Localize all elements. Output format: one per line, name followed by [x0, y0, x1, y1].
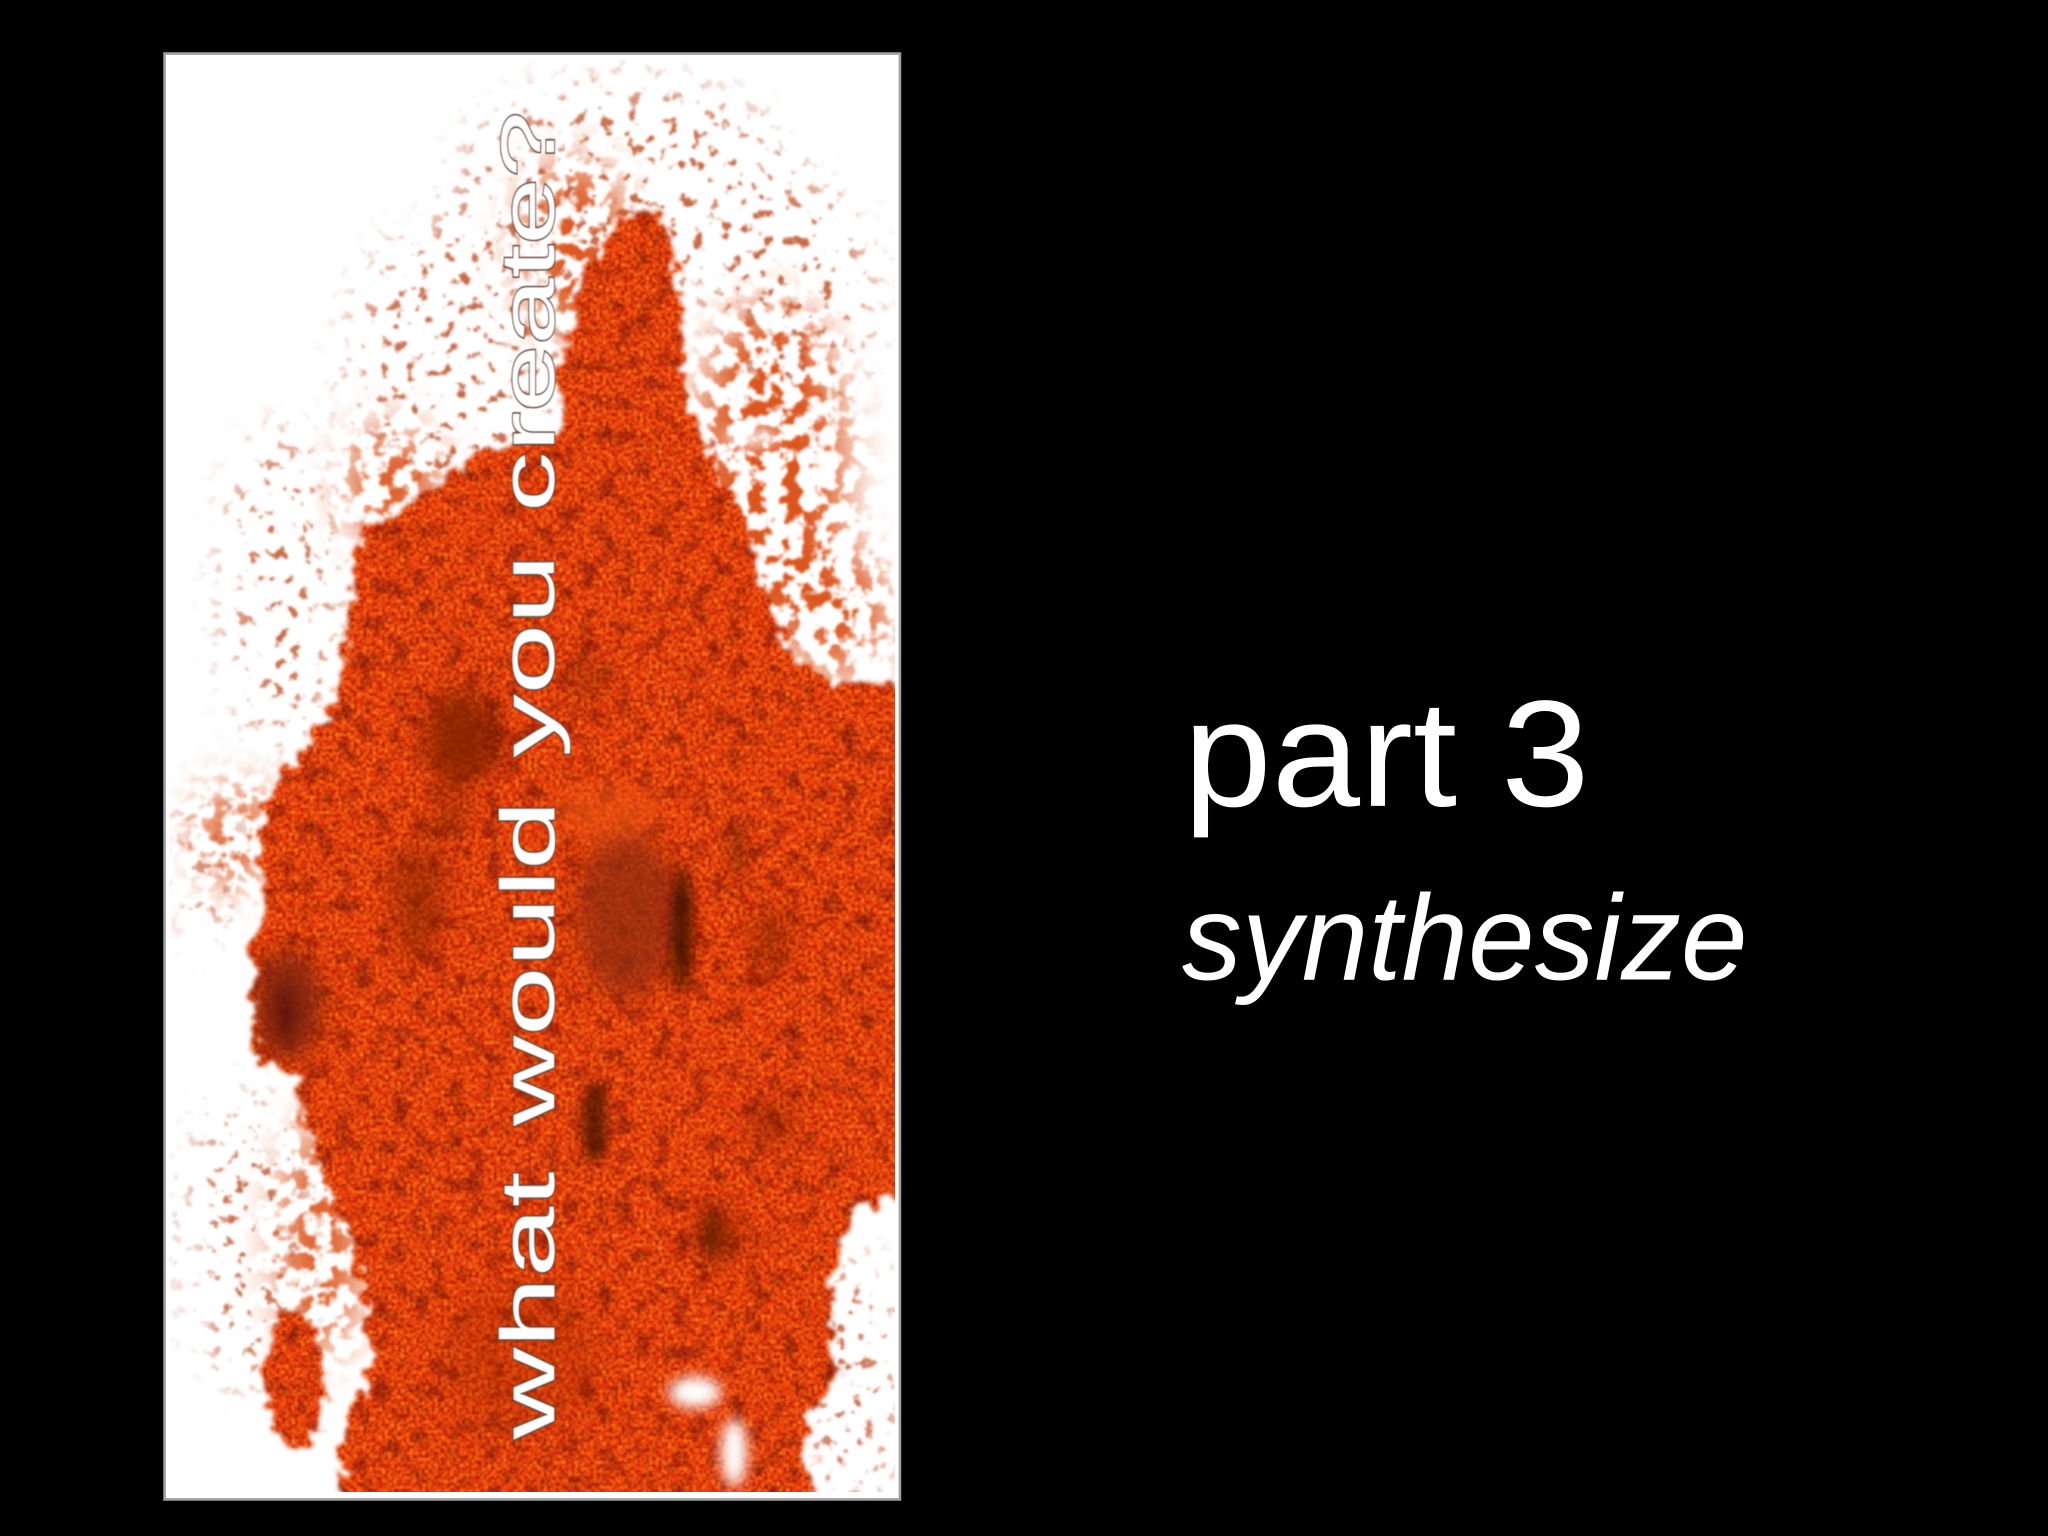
panel: spice powder poster	[165, 54, 900, 1499]
photo: red spice powder pile	[165, 54, 900, 1499]
white gaps in the powder	[180, 426, 780, 1486]
poster text: what would you create?: create?	[486, 111, 571, 512]
heading: part 3: part 3	[1183, 670, 1590, 839]
poster text: what would you create?: what	[486, 1172, 571, 1441]
poster text: what would you create?	[486, 111, 571, 1441]
poster frame	[165, 54, 900, 1499]
poster text: what would you create?: you	[486, 554, 571, 758]
subheading: synthesize: synthesize	[1182, 870, 1748, 1006]
poster text: what would you create?: would	[486, 801, 571, 1128]
slide canvas	[163, 52, 1744, 1501]
